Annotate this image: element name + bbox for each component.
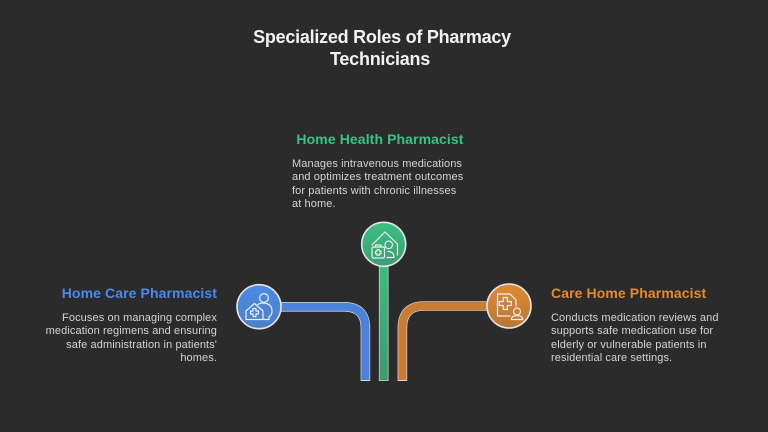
text: Care Home description: Conducts medication reviews and: [551, 312, 719, 324]
heading: Home Health Pharmacist: Home Health Pharmacist: [296, 131, 464, 147]
arrow: green connector: [379, 255, 388, 381]
heading: Home Care Pharmacist: Home Care Pharmacist: [62, 285, 217, 301]
text: Home Care description: Focuses on managing complex: [62, 312, 217, 324]
text: Home Care description: safe administration in patients': [66, 339, 217, 351]
text: Home Health description: and optimizes treatment outcomes: [292, 171, 463, 183]
title: Specialized Roles of Pharmacy: [253, 27, 511, 47]
text: Home Health description: Manages intravenous medications: [292, 158, 462, 170]
title: Technicians: [330, 49, 430, 69]
heading: Care Home Pharmacist: Care Home Pharmacist: [551, 285, 706, 301]
text: Care Home description: elderly or vulnerable patients in: [551, 339, 707, 351]
text: Home Health description: for patients with chronic illnesses: [292, 185, 456, 197]
text: Home Care description: medication regimens and ensuring: [46, 325, 217, 337]
text: Home Care description: homes.: [180, 352, 217, 364]
arrow: orange connector: [402, 306, 498, 381]
text: Care Home description: [551, 312, 719, 364]
text: Home Health description: [292, 158, 463, 210]
arrow: blue connector: [270, 307, 365, 381]
title: [253, 27, 511, 69]
text: Care Home description: supports safe medication use for: [551, 325, 713, 337]
icon: home health: [362, 222, 406, 266]
text: Care Home description: residential care settings.: [551, 352, 672, 364]
icon: care home: [487, 284, 531, 328]
icon: home care: [237, 285, 281, 329]
text: Home Care description: [46, 312, 217, 364]
text: Home Health description: at home.: [292, 198, 336, 210]
